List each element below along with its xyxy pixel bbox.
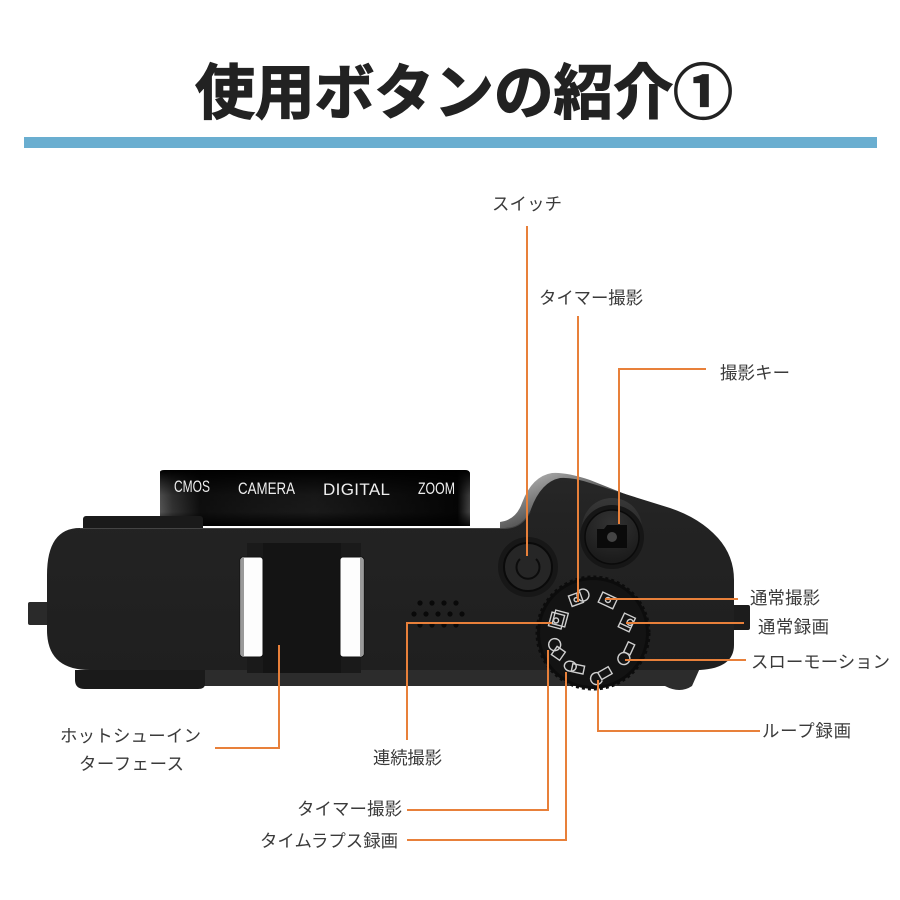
shutter button	[580, 498, 644, 569]
side strap lug left	[28, 602, 50, 625]
top left bump	[83, 516, 203, 532]
left slot	[240, 557, 263, 657]
callout: タイムラプス録画: タイムラプス録画	[260, 831, 398, 851]
side strap lug right	[730, 605, 750, 630]
callout: 通常録画: 通常録画	[758, 617, 829, 637]
callout: 撮影キー	[619, 363, 790, 524]
callout: 通常撮影: 通常撮影	[750, 588, 820, 608]
lens barrel: ZOOM	[418, 479, 455, 498]
speaker grille	[411, 600, 465, 628]
lens barrel: DIGITAL	[323, 480, 390, 499]
body edge highlight	[80, 512, 530, 528]
lens barrel: CAMERA	[238, 479, 296, 498]
lens barrel: CMOS	[174, 477, 210, 496]
callout: 撮影キー: 撮影キー	[720, 363, 790, 383]
callout: タイマー撮影 (bottom): タイマー撮影	[297, 799, 402, 819]
power switch button	[498, 537, 558, 597]
dial mode icons	[544, 587, 637, 687]
callout: 連続撮影: 連続撮影	[373, 748, 442, 768]
camera top view	[28, 470, 750, 690]
camera body	[47, 478, 734, 670]
callout: タイマー撮影 (bottom)	[297, 650, 548, 819]
callout: ホットシューインターフェース	[60, 645, 279, 774]
callout: ループ録画: ループ録画	[762, 721, 851, 741]
callout: ホットシューインターフェース: ターフェース	[79, 754, 184, 774]
lens barrel	[160, 470, 470, 526]
hot shoe	[240, 543, 364, 673]
callout: スローモーション: スローモーション	[751, 652, 890, 672]
callout: スイッチ: スイッチ	[492, 194, 562, 214]
bottom foot	[75, 670, 205, 689]
callout: ループ録画	[598, 680, 851, 741]
title underline bar	[24, 137, 877, 148]
grip highlight	[500, 473, 640, 530]
callout: タイムラプス録画	[260, 672, 566, 851]
mode dial	[537, 577, 649, 689]
callout: 連続撮影	[373, 623, 552, 768]
leather strip	[190, 668, 700, 690]
right slot	[340, 557, 364, 657]
callout: タイマー撮影 (top): タイマー撮影	[539, 288, 643, 308]
callout: ホットシューインターフェース: ホットシューイン	[60, 726, 201, 746]
title: 使用ボタンの紹介①	[195, 60, 733, 127]
